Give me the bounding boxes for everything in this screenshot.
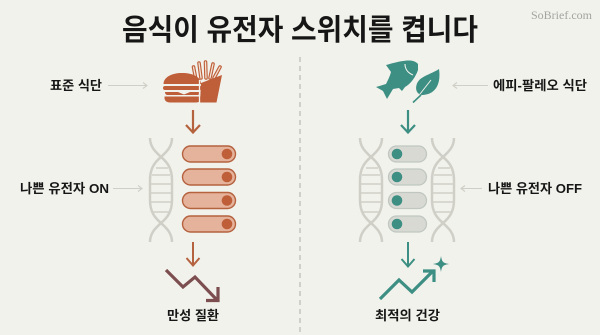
title: 음식이 유전자 스위치를 켭니다 (122, 14, 478, 47)
label: epi-paleo diet (453, 78, 587, 93)
label: standard diet: 표준 식단 (50, 78, 102, 93)
label: bad genes on (20, 181, 142, 196)
arrow: switches to disease (186, 242, 200, 266)
switches on (182, 146, 236, 232)
icon: rising trend with sparkle (380, 256, 449, 299)
arrow: burger to switches (186, 110, 200, 132)
dna left (150, 138, 172, 242)
label: chronic disease: 만성 질환 (167, 308, 219, 323)
dna right b (432, 138, 454, 242)
icon: fish and leaf (376, 60, 439, 102)
divider (299, 57, 301, 332)
watermark: SoBrief.com (531, 10, 592, 22)
arrow: food to switches (401, 110, 415, 132)
label: optimal health: 최적의 건강 (375, 308, 440, 323)
label: standard diet (50, 78, 147, 93)
icon: falling trend (166, 270, 218, 300)
label: bad genes on: 나쁜 유전자 ON (20, 181, 109, 196)
switches off (388, 146, 426, 232)
arrow: switches to health (402, 242, 414, 266)
label: bad genes off: 나쁜 유전자 OFF (488, 181, 582, 196)
icon: burger and fries (163, 62, 222, 103)
dna right a (360, 138, 382, 242)
label: epi-paleo diet: 에피-팔레오 식단 (493, 78, 587, 93)
